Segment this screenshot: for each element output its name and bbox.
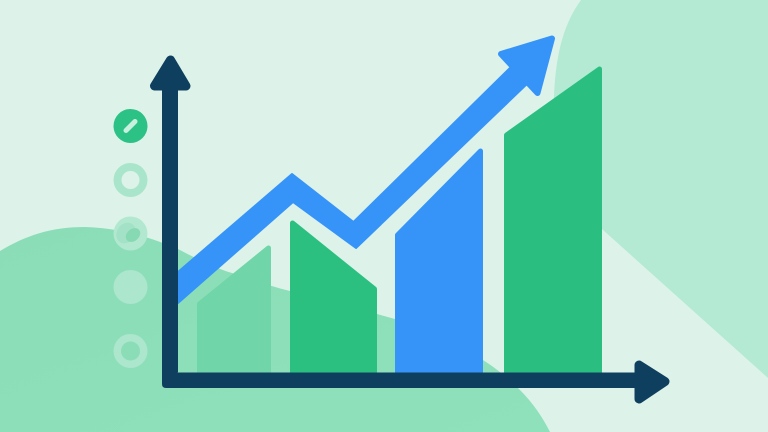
icon: solid circle — [114, 270, 148, 304]
trend arrow — [178, 38, 552, 303]
trend arrow head — [501, 38, 552, 93]
y axis arrow head — [154, 60, 186, 86]
background hill: left — [0, 227, 550, 432]
y axis arrow — [162, 88, 178, 380]
icon: ring — [114, 163, 148, 197]
status icons — [112, 109, 148, 368]
bar 3 — [398, 151, 480, 372]
bar 1 — [200, 248, 268, 372]
icon: hollow ring — [114, 334, 148, 368]
icon: active check circle — [114, 109, 148, 143]
trend line shaft — [178, 66, 529, 303]
axes — [154, 60, 665, 399]
bar 4 — [506, 69, 600, 372]
icon: leaf circle — [112, 216, 148, 250]
x axis arrow head — [639, 365, 665, 399]
x axis arrow shaft — [162, 372, 640, 388]
bar 2 — [292, 223, 374, 372]
bar chart — [200, 69, 600, 372]
background blob: right — [554, 0, 768, 378]
